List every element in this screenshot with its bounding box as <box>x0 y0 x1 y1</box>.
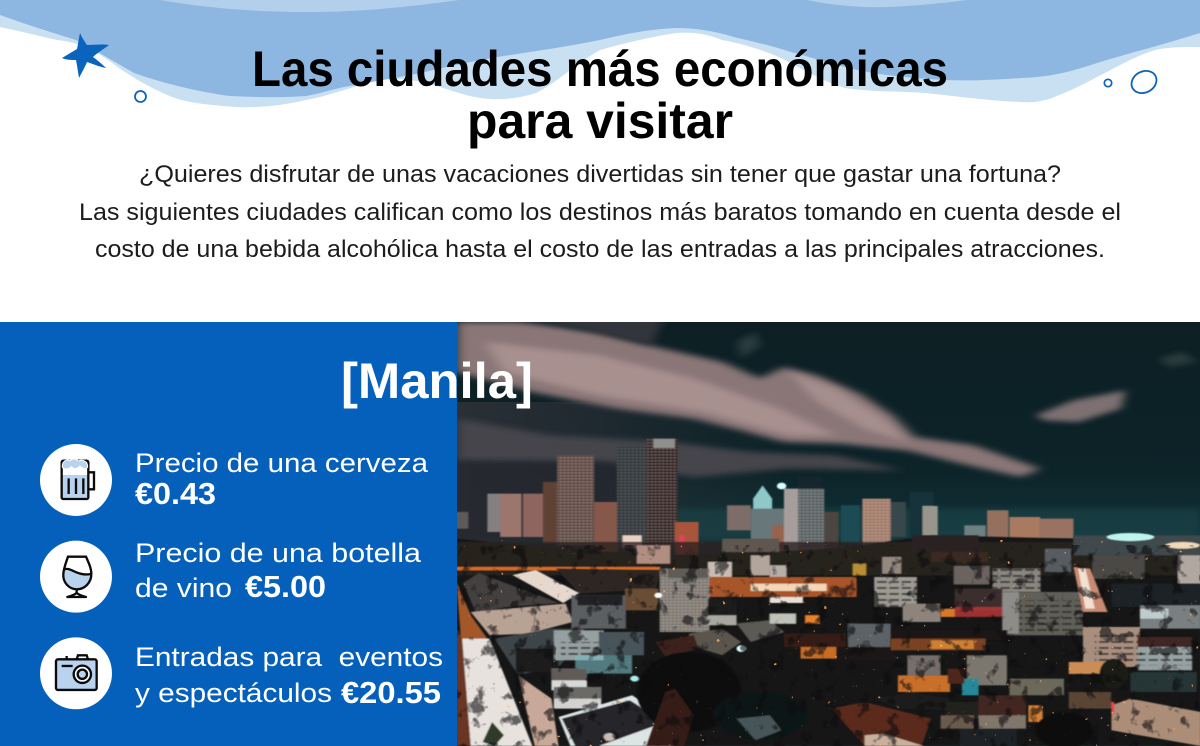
icon: starfish <box>62 33 109 78</box>
photo lower cloud bank <box>456 419 903 477</box>
events label: Entradas para eventos <box>135 642 443 672</box>
beer value: €0.43 <box>135 476 216 511</box>
photo city texture white lights <box>457 540 1200 746</box>
photo small cloud right <box>1036 390 1126 422</box>
photo: Manila night skyline <box>456 315 1200 746</box>
intro text <box>79 161 1121 263</box>
icon: bubble large right <box>1128 67 1160 97</box>
icon: beer mug <box>40 444 112 516</box>
icon: camera <box>40 637 112 709</box>
intro text: ¿Quieres disfrutar de unas vacaciones divertidas sin tener que gastar una fortuna? <box>139 161 1061 188</box>
city heading: [Manila] <box>341 353 533 409</box>
title: Las ciudades más económicas <box>252 41 948 97</box>
wine label: Precio de una botella <box>135 538 422 568</box>
photo right buildings and lights <box>831 567 1200 746</box>
header wave background <box>0 0 1200 107</box>
icon: bubble left <box>135 91 146 102</box>
title: para visitar <box>467 93 733 149</box>
panel: blue sidebar <box>0 322 457 746</box>
photo city base <box>456 533 1200 746</box>
intro text: Las siguientes ciudades califican como los destinos más baratos tomando en cuenta desde el <box>79 199 1121 226</box>
photo left dark horizon <box>462 462 616 466</box>
item: wine price <box>40 538 422 613</box>
icon: bubble small right <box>1104 79 1112 87</box>
photo city texture warm lights <box>457 540 1200 746</box>
item: beer price <box>40 444 429 516</box>
wine value: €5.00 <box>245 569 326 604</box>
photo left market roofs <box>456 569 675 746</box>
photo main cloud <box>456 315 1040 477</box>
item: events price <box>40 637 443 710</box>
events label second line: y espectáculos <box>135 678 332 708</box>
intro text: costo de una bebida alcohólica hasta el costo de las entradas a las principales atracciones. <box>95 236 1105 263</box>
photo skyline towers <box>456 439 1073 569</box>
beer label: Precio de una cerveza <box>135 448 429 478</box>
photo city texture dark blotches <box>457 545 1200 746</box>
photo center buildings and lights <box>630 569 941 746</box>
wine label second line: de vino <box>135 573 232 603</box>
events value: €20.55 <box>341 675 441 710</box>
photo sky haze left <box>457 402 700 542</box>
title <box>252 41 948 149</box>
icon: wine glass <box>40 541 112 613</box>
